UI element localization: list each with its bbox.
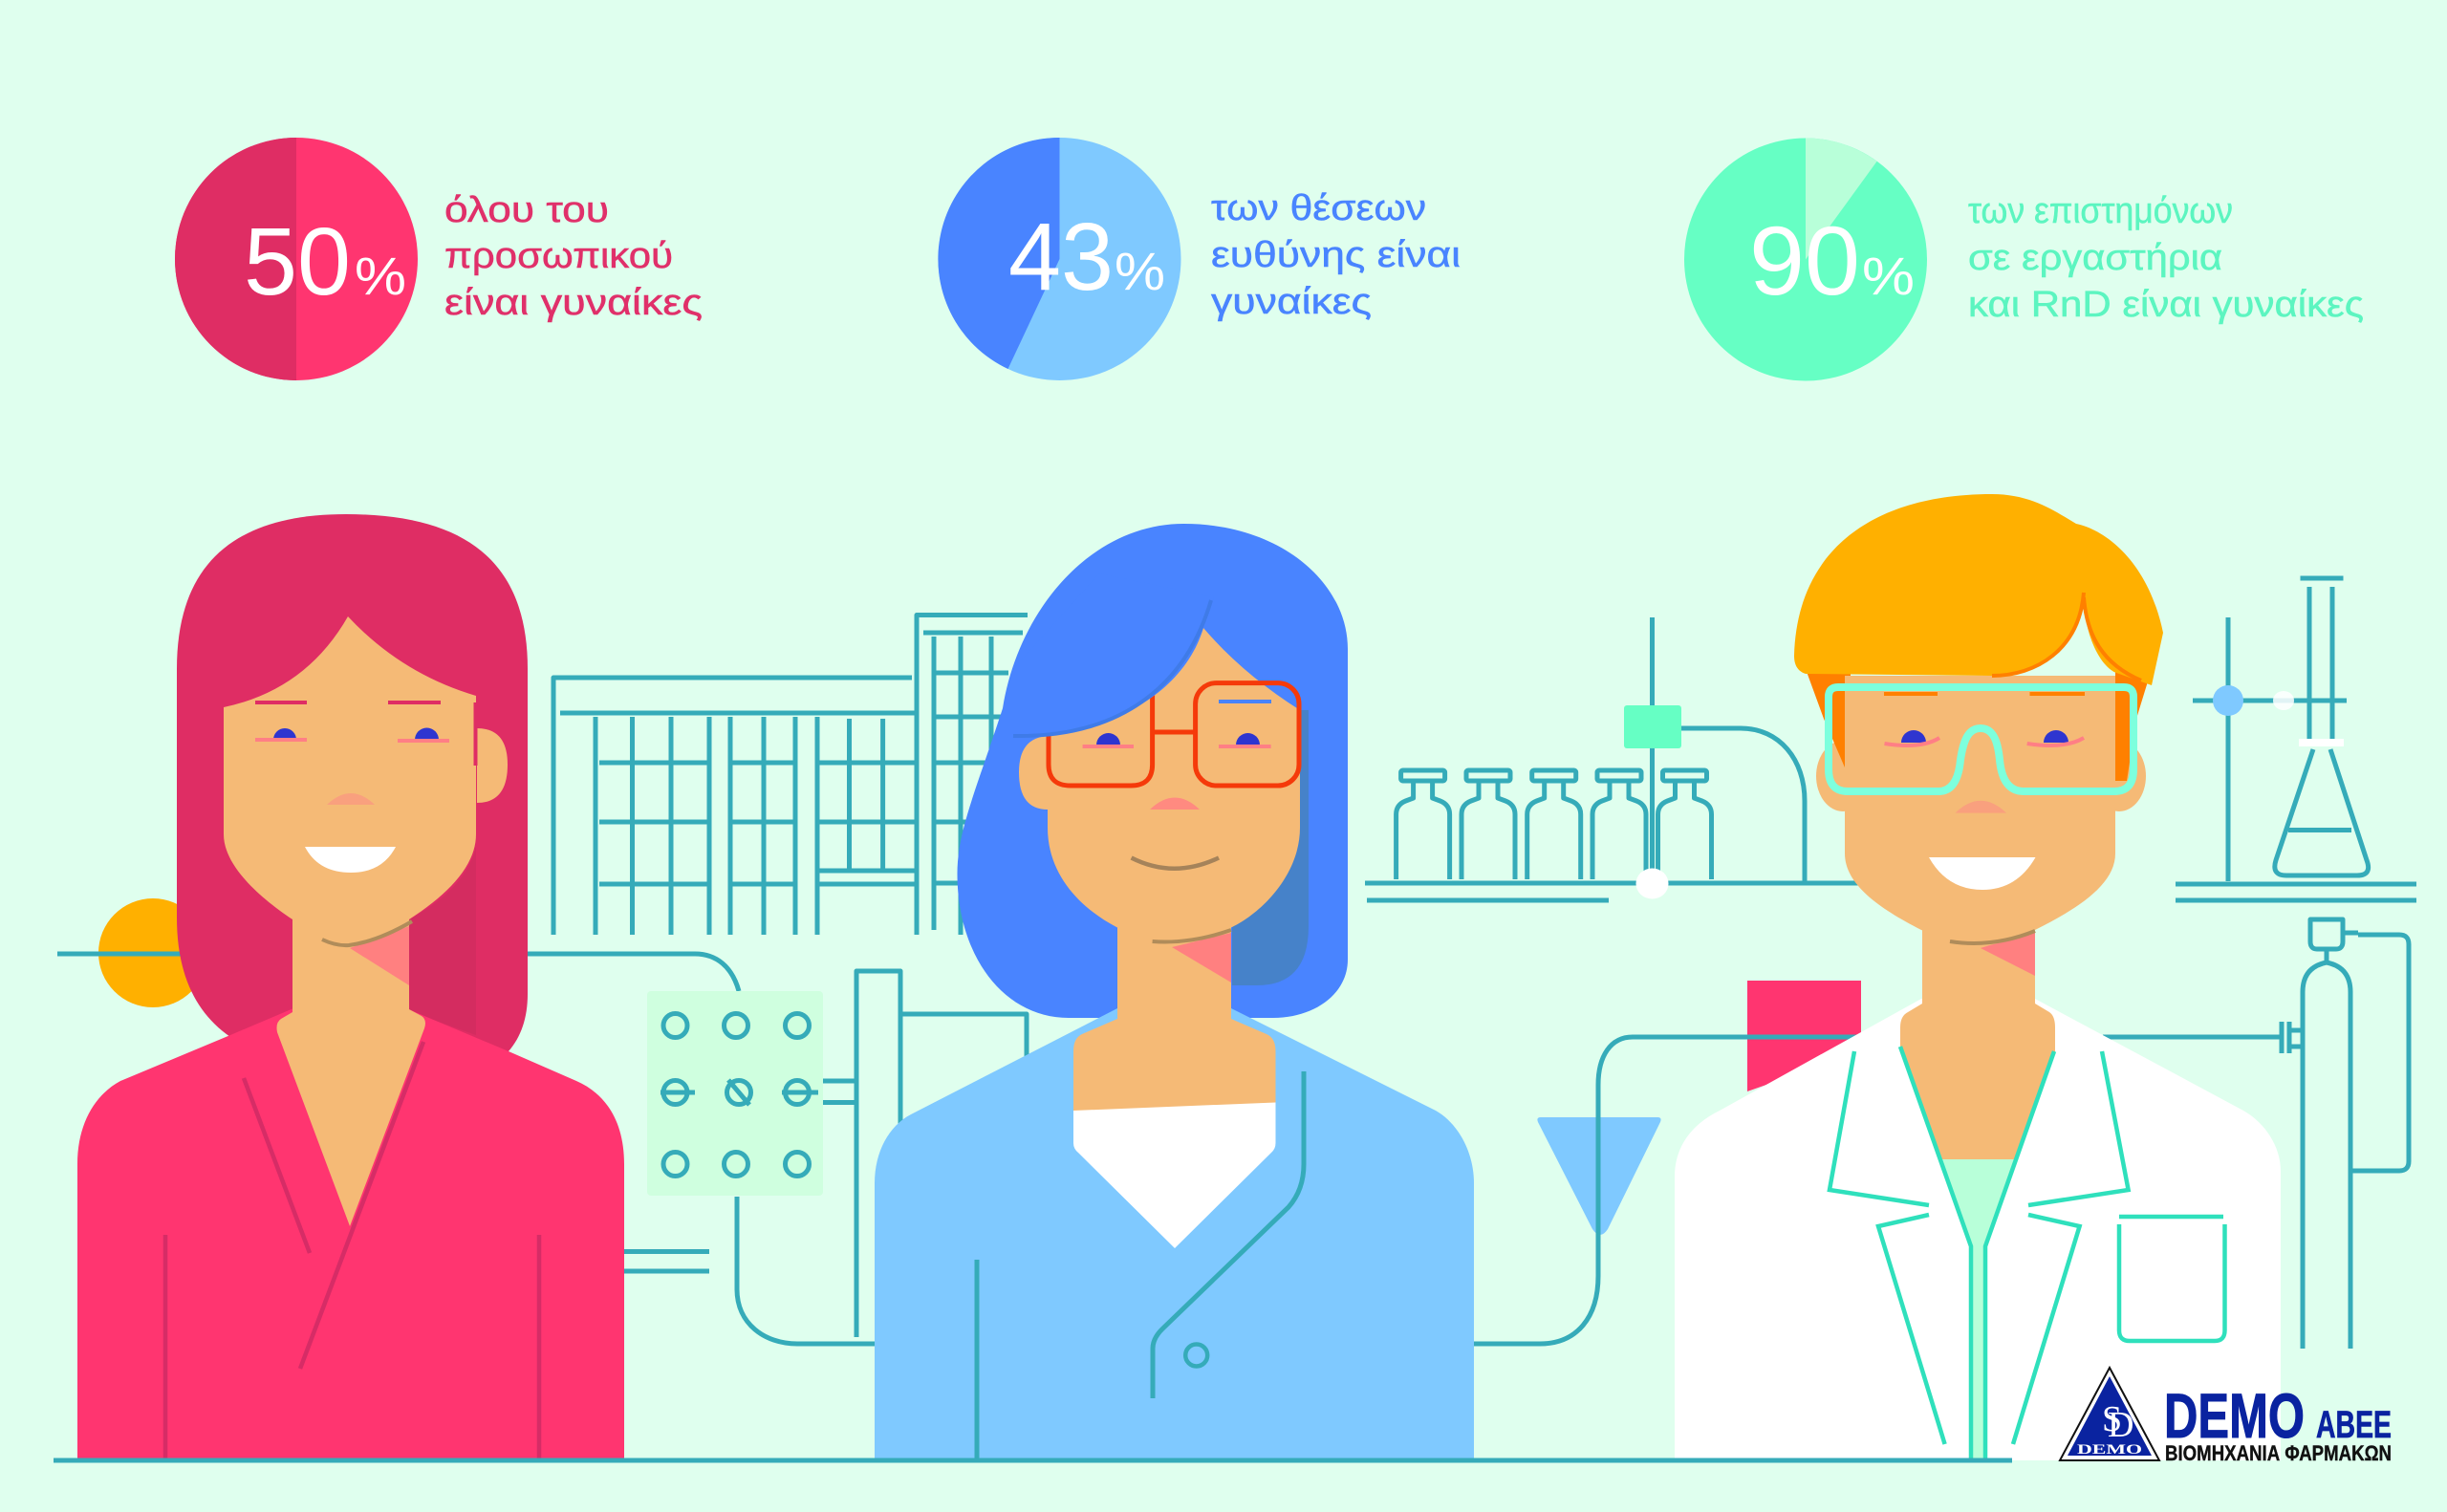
fringe edge bbox=[1992, 593, 2141, 680]
hair bbox=[958, 524, 1348, 1018]
bottle 5 bbox=[1657, 770, 1711, 879]
value: 50%: % bbox=[355, 246, 406, 306]
caption: 43%: γυναίκες bbox=[1211, 282, 1372, 322]
smile bbox=[1132, 858, 1219, 869]
caption: 50%: όλου του bbox=[444, 190, 609, 230]
chin line bbox=[1950, 931, 2035, 943]
fringe bbox=[1013, 573, 1214, 736]
smile bbox=[305, 847, 396, 873]
background: pipes and lab structure bbox=[57, 954, 2281, 1344]
caption: 50% bbox=[444, 190, 703, 323]
smile bbox=[1929, 857, 2036, 890]
hair sides bbox=[1806, 669, 2152, 781]
hair top bbox=[1794, 494, 2163, 685]
value: 43%: 43 bbox=[1008, 204, 1114, 311]
caption: 90%: και RnD είναι γυναίκες bbox=[1968, 285, 2364, 325]
panel: green control board bbox=[647, 991, 823, 1196]
caption: 90%: των επιστημόνων bbox=[1968, 191, 2233, 231]
face bbox=[1048, 628, 1300, 941]
background: yellow circle bbox=[98, 898, 207, 1007]
pie chart: 50% bbox=[175, 138, 418, 380]
background: retort stand and flask bbox=[2176, 578, 2416, 900]
neck shadow bbox=[1981, 931, 2035, 976]
background: pink-square tube bbox=[1747, 1034, 1861, 1040]
neck bbox=[1900, 908, 2055, 1159]
value: 90% bbox=[1749, 206, 1915, 315]
hair bbox=[177, 514, 528, 1051]
coat seams bbox=[977, 1071, 1304, 1460]
background: white ball bbox=[1636, 868, 1669, 898]
logo name: ABEE bbox=[2316, 1404, 2392, 1446]
blouse bbox=[77, 1008, 624, 1460]
nose bbox=[1150, 797, 1200, 810]
ears bbox=[1816, 741, 2146, 811]
value: 43% bbox=[1008, 204, 1165, 311]
baseline bbox=[54, 1458, 2012, 1462]
neck bbox=[1073, 908, 1275, 1118]
logo: DEMO ABEE bbox=[2060, 1368, 2392, 1465]
logo name bbox=[2164, 1380, 2392, 1465]
logo triangle bbox=[2060, 1368, 2159, 1460]
caption: 43%: ευθύνης είναι bbox=[1211, 235, 1461, 275]
value: 90%: % bbox=[1862, 246, 1915, 306]
caption: 50%: προσωπικού bbox=[444, 236, 673, 276]
stat: 90% of lab and RnD scientists bbox=[1684, 138, 2364, 380]
neck bbox=[277, 898, 425, 1226]
value: 50%: 50 bbox=[244, 208, 351, 315]
person: blue figure bbox=[875, 524, 1474, 1460]
caption: 90% bbox=[1968, 191, 2364, 325]
white shirt bbox=[1073, 1103, 1275, 1248]
background: pink square bbox=[1747, 981, 1861, 1091]
value: 90%: 90 bbox=[1749, 206, 1860, 315]
undershirt bbox=[1942, 1159, 2014, 1460]
value: 50% bbox=[244, 208, 406, 315]
neck shadow bbox=[350, 926, 409, 985]
neck shadow bbox=[1172, 933, 1231, 983]
caption: 90%: σε εργαστήρια bbox=[1968, 238, 2222, 278]
value: 43%: % bbox=[1115, 241, 1165, 301]
bottle 2 bbox=[1462, 770, 1515, 879]
logo triangle: S bbox=[2102, 1399, 2122, 1439]
pie chart: 43% bbox=[938, 138, 1181, 380]
logo triangle: DEMO bbox=[2077, 1442, 2142, 1458]
lab coat bbox=[1675, 999, 2281, 1460]
caption: 43%: των θέσεων bbox=[1211, 188, 1426, 228]
eyes bbox=[255, 702, 476, 766]
logo triangle: D bbox=[2108, 1405, 2133, 1445]
ear bbox=[477, 728, 508, 803]
hair shadow bbox=[409, 847, 476, 1035]
stat: 43% of management posts bbox=[938, 138, 1461, 380]
left lens bbox=[1049, 688, 1196, 786]
face bbox=[1845, 676, 2115, 946]
background: gas cylinder bbox=[2282, 919, 2409, 1349]
logo name: ΒΙΟΜΗΧΑΝΙΑ ΦΑΡΜΑΚΩΝ bbox=[2165, 1441, 2392, 1465]
bottle 3 bbox=[1527, 770, 1581, 879]
person: yellow figure bbox=[1675, 494, 2281, 1460]
nose bbox=[1956, 801, 2006, 813]
background: green block bbox=[1624, 705, 1681, 748]
fringe edge bbox=[1013, 600, 1211, 736]
ear bbox=[1019, 736, 1048, 810]
chin line bbox=[322, 921, 412, 945]
pie chart: 90% bbox=[1684, 138, 1927, 380]
background: funnel tube bbox=[1596, 1085, 1600, 1242]
background: building outline bbox=[553, 616, 1028, 935]
coat lines bbox=[1830, 1047, 2225, 1460]
blouse seams bbox=[165, 1042, 539, 1460]
bottle 4 bbox=[1592, 770, 1646, 879]
bottle 1 bbox=[1397, 770, 1450, 879]
person: pink figure bbox=[77, 514, 624, 1460]
background: funnel bbox=[1537, 1117, 1661, 1235]
hair shadow bbox=[1232, 710, 1309, 985]
eyes bbox=[1884, 694, 2085, 745]
coat button bbox=[1185, 1344, 1207, 1367]
face bbox=[224, 616, 476, 946]
right lens bbox=[1196, 683, 1299, 786]
caption: 43% bbox=[1211, 188, 1461, 322]
background: bench and bottles bbox=[1365, 617, 1861, 900]
nose bbox=[327, 793, 375, 805]
eyes bbox=[1083, 702, 1271, 746]
logo name: DEMO bbox=[2164, 1380, 2305, 1451]
stat: 50% of all staff bbox=[175, 138, 703, 380]
goggles bbox=[1829, 687, 2133, 791]
coat bbox=[875, 1008, 1474, 1460]
caption: 50%: είναι γυναίκες bbox=[444, 283, 703, 323]
chin line bbox=[1153, 930, 1231, 942]
